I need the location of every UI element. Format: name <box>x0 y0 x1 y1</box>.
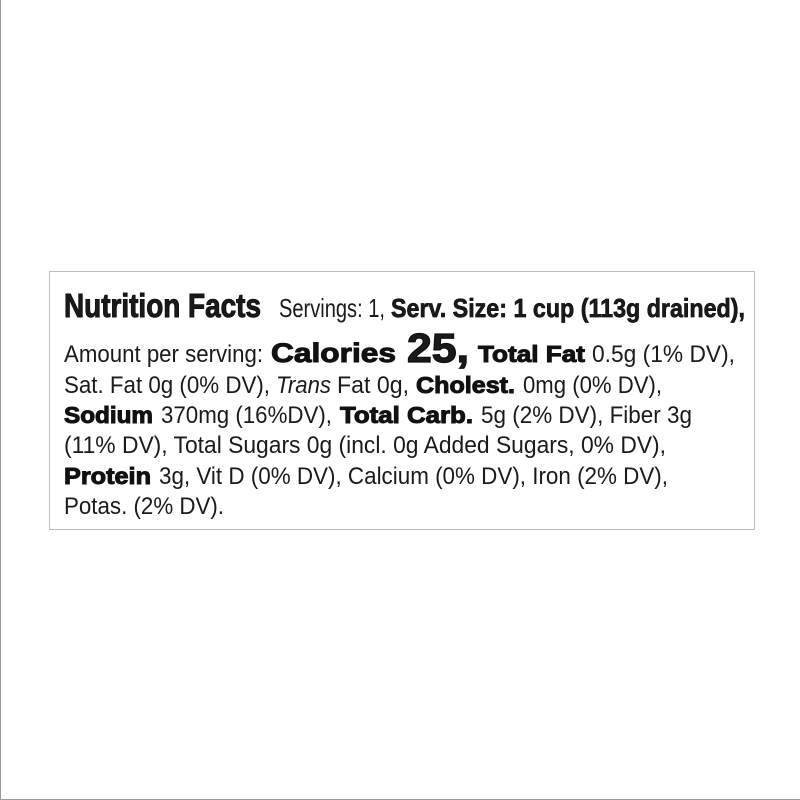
panel: nutrition facts box <box>50 272 754 530</box>
serving size: Serv. Size: 1 cup (113g drained), <box>391 293 745 323</box>
amount per serving label: Amount per serving: <box>64 341 263 368</box>
trans fat: Fat 0g, <box>337 372 409 399</box>
total fat label: Total Fat <box>478 341 585 367</box>
protein label: Protein <box>64 463 151 489</box>
total carb label: Total Carb. <box>340 402 473 428</box>
title: Nutrition Facts: Nutrition Facts <box>64 287 261 324</box>
servings text: Servings: 1, <box>279 293 385 323</box>
protein value and minerals: 3g, Vit D (0% DV), Calcium (0% DV), Iron (2% DV), <box>159 463 668 490</box>
cholesterol value: 0mg (0% DV), <box>523 372 662 399</box>
trans fat: Trans <box>276 372 331 399</box>
calories label: Calories <box>271 338 396 368</box>
potassium: Potas. (2% DV). <box>64 493 224 520</box>
calories value: 25, <box>407 325 469 371</box>
sodium label: Sodium <box>64 402 153 428</box>
trans fat <box>276 372 409 399</box>
sodium value: 370mg (16%DV), <box>161 402 332 429</box>
total fat value: 0.5g (1% DV), <box>592 341 735 368</box>
fiber dv and sugars: (11% DV), Total Sugars 0g (incl. 0g Added Sugars, 0% DV), <box>64 432 666 459</box>
cholesterol label: Cholest. <box>416 372 515 398</box>
carb and fiber value: 5g (2% DV), Fiber 3g <box>481 402 692 429</box>
saturated fat: Sat. Fat 0g (0% DV), <box>64 372 270 399</box>
